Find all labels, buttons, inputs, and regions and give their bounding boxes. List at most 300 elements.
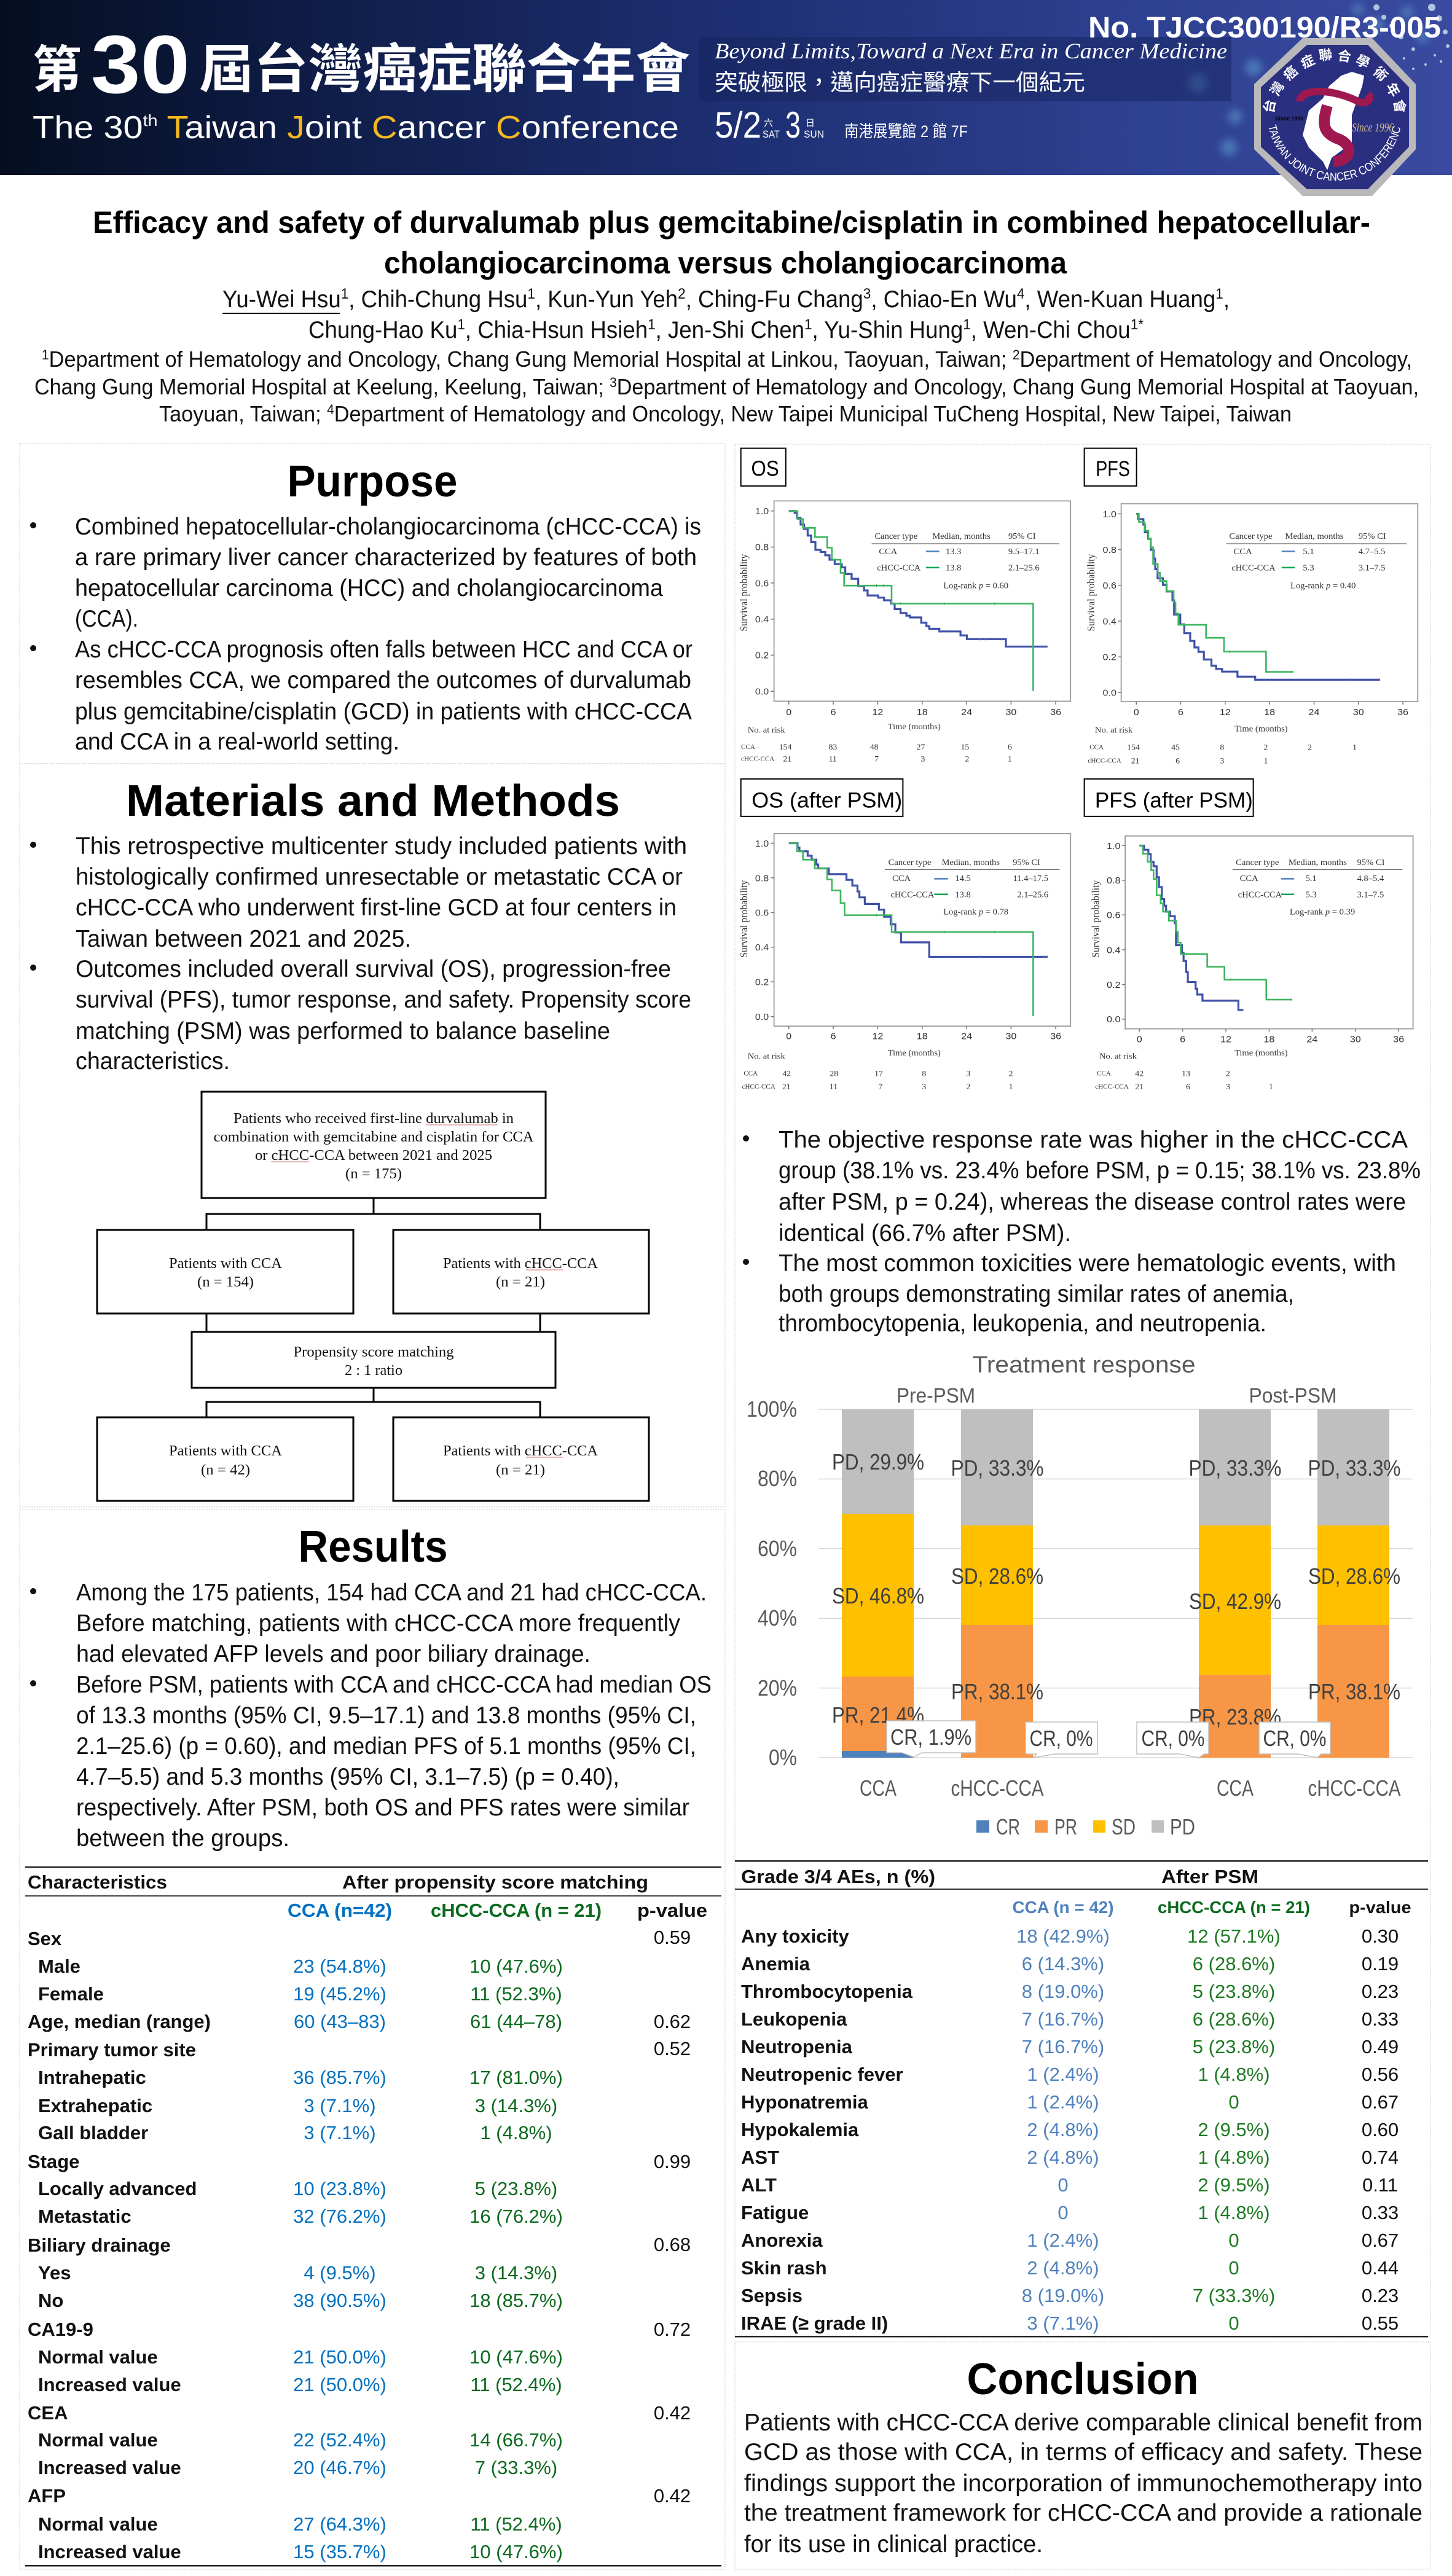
table body rows: 19 (45.2%) [293, 1983, 387, 2005]
icon: conference logo: 癌 [1281, 63, 1301, 84]
callout: CR 0% Post-PSM cHCC-CCA: CR, 0% [1263, 1726, 1326, 1751]
authors [222, 286, 1230, 343]
table body rows: 0.99 [654, 2151, 691, 2172]
number at risk: 154 [1127, 743, 1140, 752]
table body rows: 2 (4.8%) [1027, 2119, 1099, 2140]
response and toxicity bullets: The objective response rate was higher in the cHCC-CCA [779, 1127, 1408, 1153]
results bullets: respectively. After PSM, both OS and PFS rates were similar [76, 1795, 689, 1821]
table body rows: 15 (35.7%) [293, 2541, 387, 2562]
chart: OS after PSM survival curve: 36 [1050, 1032, 1061, 1041]
number at risk: 6 [1008, 742, 1012, 751]
purpose bullets: and CCA in a real-world setting. [75, 729, 399, 755]
icon: conference logo: Since 1996 [1352, 121, 1394, 135]
callout: CR 1.9% [887, 1721, 976, 1757]
chart: OS survival curve: 12 [872, 707, 883, 718]
chart: PFS after PSM survival curve: Time (months) [1234, 1049, 1288, 1058]
header banner [0, 0, 1452, 175]
authors: , [1223, 286, 1230, 313]
results bullets [30, 1580, 712, 1852]
label box: OS [741, 448, 786, 486]
number at risk: 1 [1009, 1082, 1013, 1091]
legend: 95% CI [1357, 858, 1385, 867]
purpose bullets: Combined hepatocellular-cholangiocarcinoma (cHCC-CCA) is [75, 514, 701, 540]
authors: , Kun-Yun Yeh [535, 286, 678, 313]
authors: , Chiao-En Wu [871, 286, 1017, 313]
number at risk: 154 [779, 742, 792, 751]
date and venue [715, 104, 968, 146]
chart: PFS survival curve: 0.0 [1102, 688, 1116, 698]
tagline Chinese: 突破極限，邁向癌症醫療下一個紀元 [715, 70, 1085, 95]
table: grade 3/4 adverse events [735, 1860, 1428, 2337]
icon: conference logo [1254, 38, 1416, 196]
chart: OS survival curve: 24 [961, 707, 972, 718]
heading: conclusion: Conclusion [967, 2355, 1198, 2404]
table body rows: Intrahepatic [38, 2067, 146, 2088]
panel: conclusion [744, 2355, 1423, 2558]
number at risk: 28 [830, 1069, 838, 1078]
legend: 95% CI [1008, 532, 1036, 541]
flow box: all patients: Patients who received first-line durvalumab in [233, 1111, 514, 1127]
table body rows: Skin rash [741, 2257, 827, 2279]
results bullets: had elevated AFP levels and poor biliary drainage. [76, 1641, 591, 1667]
conclusion text: for its use in clinical practice. [744, 2531, 1043, 2558]
table body rows: 0 [1228, 2312, 1239, 2334]
bar: Post-PSM cHCC-CCA: PD, 33.3% [1308, 1455, 1401, 1481]
table body rows: Sex [28, 1928, 62, 1949]
table body rows: 3 (7.1%) [304, 2095, 376, 2116]
legend: 5.3 [1303, 563, 1314, 573]
table header row [28, 1871, 707, 1921]
icon: conference logo: 灣 [1267, 79, 1287, 98]
methods bullets: cHCC-CCA who underwent first-line GCD at four centers in [76, 895, 677, 921]
date and venue: 六 [764, 118, 773, 128]
number at risk: 48 [870, 742, 879, 751]
response and toxicity bullets: identical (66.7% after PSM). [779, 1220, 1071, 1247]
table body rows: Normal value [38, 2429, 158, 2451]
flow box: cHCC-CCA after matching: (n = 21) [496, 1462, 545, 1478]
legend: 2.1–25.6 [1017, 890, 1048, 899]
poster title [93, 205, 1370, 280]
flow box: all patients: or cHCC-CCA between 2021 and 2025 [255, 1148, 492, 1164]
flow box: CCA before matching: Patients with CCA [169, 1256, 283, 1272]
label box: OS after PSM: OS (after PSM) [752, 788, 902, 812]
authors: Chung-Hao Ku [308, 317, 467, 343]
chart: PFS after PSM survival curve: 0.4 [1107, 945, 1121, 955]
number at risk: 1 [1008, 754, 1012, 763]
label box: PFS after PSM: PFS (after PSM) [1095, 788, 1253, 812]
y axis labels: 0% [769, 1745, 797, 1770]
flow box: all patients: (n = 175) [345, 1166, 402, 1182]
bar: Post-PSM cHCC-CCA: SD, 28.6% [1308, 1564, 1400, 1589]
legend: 5.1 [1303, 547, 1314, 557]
chart: PFS survival curve: 0.8 [1102, 545, 1116, 555]
authors: , Chih-Chung Hsu [348, 286, 527, 313]
table body rows: 1 (4.8%) [480, 2122, 552, 2143]
affiliations: Department of Hematology and Oncology, Chang Gung Memorial Hospital at Linkou, Taoyuan, Taiwan; [49, 346, 1013, 372]
table body rows: 10 (47.6%) [469, 2346, 563, 2368]
legend: Median, months [1289, 858, 1347, 867]
table header row: Grade 3/4 AEs, n (%) [741, 1866, 935, 1887]
number at risk: 83 [828, 742, 838, 751]
chart: OS after PSM survival curve: 24 [961, 1032, 972, 1041]
table body rows: 0.62 [654, 2011, 691, 2032]
chart: PFS survival curve: 12 [1220, 707, 1231, 718]
table body rows: 6 (14.3%) [1022, 1953, 1104, 1975]
table body rows: Primary tumor site [28, 2039, 196, 2061]
legend: 13.8 [955, 890, 971, 899]
bar: Pre-PSM CCA [832, 1409, 924, 1758]
chart legend: CR [996, 1814, 1020, 1839]
bar: Post-PSM CCA: SD, 42.9% [1189, 1589, 1281, 1614]
table body rows: Sepsis [741, 2285, 803, 2306]
table body rows: 14 (66.7%) [469, 2429, 563, 2451]
icon: conference logo: 台 [1261, 98, 1279, 114]
authors: 2 [678, 286, 686, 302]
affiliations: Chang Gung Memorial Hospital at Keelung, Keelung, Taiwan; [34, 374, 635, 399]
icon: conference logo: 合 [1336, 48, 1352, 65]
legend: 5.1 [1306, 874, 1317, 883]
table body rows: No [38, 2290, 63, 2311]
flow box: cHCC-CCA before matching [393, 1230, 649, 1313]
table body rows: 0.72 [654, 2319, 691, 2340]
number at risk: 17 [874, 1069, 883, 1078]
chart: PFS after PSM survival curve: 30 [1350, 1035, 1361, 1044]
purpose bullets: resembles CCA, we compared the outcomes of durvalumab [75, 667, 691, 694]
chart: OS after PSM survival curve: 0.4 [755, 943, 769, 953]
table body rows: Female [38, 1983, 104, 2005]
x axis labels: cHCC-CCA [1308, 1775, 1401, 1801]
table body rows: 32 (76.2%) [293, 2206, 387, 2227]
table body rows: 6 (28.6%) [1193, 1953, 1275, 1975]
number at risk: No. at risk [1095, 726, 1133, 735]
number at risk: 7 [879, 1082, 883, 1091]
legend: Median, months [932, 532, 991, 541]
legend: 11.4–17.5 [1013, 874, 1048, 883]
table body rows: 12 (57.1%) [1187, 1925, 1281, 1947]
flow box: all patients: combination with gemcitabine and cisplatin for CCA [214, 1129, 534, 1145]
chart: OS after PSM survival curve: 0.0 [755, 1012, 769, 1022]
chart: OS after PSM survival curve: Time (months) [888, 1049, 941, 1058]
table body rows: 10 (47.6%) [469, 2541, 563, 2562]
number at risk: No. at risk [1099, 1052, 1137, 1061]
number at risk: CCA [1089, 744, 1104, 751]
table body rows: Any toxicity [741, 1925, 849, 1947]
results bullets: Among the 175 patients, 154 had CCA and 21 had cHCC-CCA. [76, 1580, 707, 1606]
table body rows: 11 (52.4%) [470, 2513, 562, 2535]
legend: 4.8–5.4 [1357, 874, 1384, 883]
table body rows: Metastatic [38, 2206, 131, 2227]
number at risk: 15 [961, 742, 970, 751]
chart: OS survival curve: 6 [831, 707, 836, 718]
heading: materials and methods: Materials and Methods [126, 777, 620, 826]
legend: 4.7–5.5 [1359, 547, 1386, 557]
group label: Post-PSM: Post-PSM [1249, 1384, 1337, 1407]
conclusion text: the treatment framework for cHCC-CCA and provide a rationale [744, 2500, 1423, 2526]
chart: OS survival curve: 0.2 [755, 651, 769, 661]
affiliations: 2 [1013, 347, 1020, 362]
table body rows: Neutropenia [741, 2036, 853, 2057]
chart: OS after PSM survival curve: 6 [831, 1032, 836, 1041]
icon: conference logo: 年 [1383, 80, 1403, 100]
chart: PFS survival curve: 1.0 [1102, 509, 1116, 520]
legend [1226, 532, 1407, 590]
table body rows: 0.11 [1362, 2174, 1398, 2196]
table header row: CCA (n = 42) [1013, 1898, 1113, 1917]
number at risk: CCA [744, 1070, 758, 1077]
chart legend: SD [1112, 1814, 1136, 1839]
icon: conference logo: 症 [1298, 52, 1317, 71]
chart: PFS survival curve: 24 [1308, 707, 1320, 718]
table body rows: Increased value [38, 2541, 181, 2562]
methods bullets: histologically confirmed unresectable or metastatic CCA or [76, 864, 683, 890]
table body rows [741, 1925, 1399, 2334]
label box: OS: OS [752, 456, 779, 480]
table body rows: 11 (52.3%) [470, 1983, 562, 2005]
results bullets: 2.1–25.6) (p = 0.60), and median PFS of 5.1 months (95% CI, [76, 1733, 696, 1760]
table body rows: 1 (2.4%) [1027, 2091, 1099, 2113]
table body rows: 3 (14.3%) [475, 2262, 557, 2284]
number at risk: 21 [782, 1082, 791, 1091]
legend: Log-rank p = 0.39 [1290, 907, 1355, 917]
results bullets: of 13.3 months (95% CI, 9.5–17.1) and 13.8 months (95% CI, [76, 1702, 696, 1729]
table header row: After PSM [1161, 1866, 1258, 1887]
table body rows: 5 (23.8%) [1193, 1981, 1275, 2002]
results bullets: 4.7–5.5) and 5.3 months (95% CI, 3.1–7.5) (p = 0.40), [76, 1764, 619, 1790]
authors: 1 [648, 316, 656, 333]
table body rows: ALT [741, 2174, 777, 2196]
chart: PFS after PSM survival curve: 0.8 [1107, 876, 1120, 886]
conclusion text: findings support the incorporation of immunochemotherapy into [744, 2470, 1423, 2497]
methods bullets [30, 833, 691, 1075]
table body rows: 60 (43–83) [294, 2011, 386, 2032]
number at risk: 2 [965, 754, 969, 763]
flow box: CCA after matching: (n = 42) [201, 1462, 250, 1478]
table body rows: 3 (7.1%) [304, 2122, 376, 2143]
table header row [741, 1866, 1411, 1917]
table body rows: 0.42 [654, 2402, 691, 2424]
chart: PFS after PSM survival curve: 1.0 [1107, 841, 1121, 851]
x axis labels: CCA [1217, 1775, 1254, 1801]
chart: OS after PSM survival curve: 0.8 [755, 874, 769, 883]
number at risk: 27 [917, 742, 925, 751]
table body rows: Yes [38, 2262, 71, 2284]
panel: materials and methods [30, 777, 691, 1501]
authors: 1 [963, 316, 971, 333]
legend: Log-rank p = 0.78 [943, 907, 1008, 917]
table body rows: 0.33 [1362, 2202, 1399, 2223]
methods bullets: Outcomes included overall survival (OS), progression-free [76, 956, 671, 982]
conference title English: Taiwan Joint Cancer Conference [167, 110, 664, 146]
chart: PFS survival curve: Time (months) [1234, 724, 1288, 734]
callout: CR 0% Post-PSM CCA [1137, 1722, 1209, 1758]
legend: CCA [1234, 547, 1253, 557]
methods bullets: matching (PSM) was performed to balance baseline [76, 1018, 610, 1044]
table body rows: Normal value [38, 2513, 158, 2535]
table body rows: 0.60 [1362, 2119, 1399, 2140]
bar: Pre-PSM CCA: PR, 21.4% [832, 1702, 924, 1728]
legend: 14.5 [955, 874, 971, 883]
authors: 4 [1017, 286, 1024, 302]
number at risk: CCA [741, 743, 755, 751]
legend: 13.3 [946, 547, 961, 557]
table body rows [28, 1927, 691, 2562]
number at risk: No. at risk [748, 1052, 786, 1061]
chart: PFS after PSM survival curve: 12 [1220, 1035, 1231, 1044]
chart: PFS after PSM survival curve: 18 [1263, 1035, 1274, 1044]
chart: PFS survival curve [1085, 448, 1418, 765]
number at risk: 11 [829, 754, 837, 763]
date and venue: SUN [804, 128, 824, 140]
chart legend: PR [1054, 1814, 1077, 1839]
legend: CCA [879, 547, 898, 557]
legend: Cancer type [1229, 532, 1273, 541]
chart: OS survival curve: 36 [1050, 707, 1061, 718]
chart: PFS survival curve: 18 [1264, 707, 1275, 718]
response and toxicity bullets: group (38.1% vs. 23.4% before PSM, p = 0.15; 38.1% vs. 23.8% [779, 1157, 1421, 1184]
chart: PFS survival curve: 0 [1134, 707, 1139, 718]
table body rows: 0.52 [654, 2038, 691, 2059]
chart: OS survival curve: 0.4 [755, 615, 769, 625]
authors: , Chia-Hsun Hsieh [465, 317, 648, 343]
table body rows: 0.23 [1362, 1981, 1399, 2002]
date and venue: 5/2 [715, 104, 761, 146]
number at risk: cHCC-CCA [1095, 1083, 1129, 1090]
table body rows: Gall bladder [38, 2122, 148, 2143]
table body rows: 2 (9.5%) [1198, 2174, 1270, 2196]
results bullets: Before matching, patients with cHCC-CCA more frequently [76, 1610, 680, 1637]
callout: CR 0% Pre-PSM cHCC-CCA: CR, 0% [1030, 1726, 1093, 1751]
chart: OS survival curve: 0.8 [755, 542, 769, 553]
table body rows: IRAE (≥ grade II) [741, 2312, 888, 2334]
table body rows: Increased value [38, 2457, 181, 2478]
chart: OS survival curve: 1.0 [755, 507, 769, 517]
number at risk: cHCC-CCA [1088, 758, 1121, 764]
table body rows: 6 (28.6%) [1193, 2008, 1275, 2030]
conclusion text: GCD as those with CCA, in terms of efficacy and safety. These [744, 2439, 1423, 2465]
legend: cHCC-CCA [1238, 890, 1282, 899]
chart: PFS after PSM survival curve: 0.2 [1107, 980, 1120, 990]
table body rows: Hypokalemia [741, 2119, 859, 2140]
chart: treatment response stacked bars [747, 1352, 1413, 1839]
chart title: Treatment response [972, 1352, 1196, 1378]
chart: PFS after PSM survival curve: 0 [1137, 1035, 1142, 1044]
number at risk: 2 [1009, 1069, 1013, 1078]
table header row: CCA (n=42) [288, 1900, 392, 1921]
icon: conference logo: 聯 [1317, 47, 1333, 63]
affiliations: 3 [610, 375, 617, 390]
flow box: cHCC-CCA before matching: Patients with cHCC-CCA [443, 1256, 598, 1272]
icon: conference logo: 會 [1391, 98, 1408, 114]
table header row: p-value [637, 1900, 707, 1921]
legend: Cancer type [889, 858, 931, 867]
chart: PFS after PSM survival curve [1085, 779, 1413, 1091]
purpose bullets: hepatocellular carcinoma (HCC) and cholangiocarcinoma [75, 575, 663, 601]
conclusion text: Patients with cHCC-CCA derive comparable clinical benefit from [744, 2410, 1423, 2436]
table body rows: 2 (9.5%) [1198, 2119, 1270, 2140]
table body rows: Hyponatremia [741, 2091, 868, 2113]
table body rows: 2 (4.8%) [1027, 2147, 1099, 2168]
table body rows: 0.44 [1362, 2257, 1399, 2279]
methods bullets: This retrospective multicenter study included patients with [76, 833, 687, 859]
table body rows: 2 (4.8%) [1027, 2257, 1099, 2279]
flow box: cHCC-CCA after matching: Patients with cHCC-CCA [443, 1443, 598, 1459]
legend [871, 532, 1059, 590]
legend: Median, months [1285, 532, 1343, 541]
number at risk: 2 [966, 1082, 970, 1091]
bar: Pre-PSM cHCC-CCA: PR, 38.1% [951, 1679, 1043, 1704]
affiliations: Department of Hematology and Oncology, Chang Gung Memorial Hospital at Taoyuan, [617, 374, 1419, 399]
table body rows: 0.49 [1362, 2036, 1399, 2057]
authors: 1 [457, 316, 465, 333]
table body rows: 61 (44–78) [470, 2011, 562, 2032]
poster title: Efficacy and safety of durvalumab plus gemcitabine/cisplatin in combined hepatocellular- [93, 205, 1370, 240]
label box: OS after PSM [741, 779, 903, 816]
table body rows: Age, median (range) [28, 2011, 211, 2032]
purpose bullets [30, 514, 701, 755]
chart: OS survival curve: Survival probability [738, 554, 750, 632]
conference title Chinese: 屆台灣癌症聯合年會 [199, 40, 690, 99]
tagline backdrop [699, 37, 1231, 101]
heading: purpose: Purpose [288, 457, 457, 506]
flow box: propensity score matching: 2 : 1 ratio [345, 1363, 402, 1379]
table body rows: 36 (85.7%) [293, 2067, 387, 2088]
chart: PFS survival curve: 36 [1397, 707, 1408, 718]
methods bullets: Taiwan between 2021 and 2025. [76, 926, 411, 952]
table body rows: 8 (19.0%) [1022, 2285, 1104, 2306]
bar: Post-PSM CCA: PD, 33.3% [1188, 1455, 1282, 1481]
number at risk: cHCC-CCA [741, 756, 775, 762]
icon: conference logo: 學 [1354, 52, 1372, 71]
chart: PFS survival curve: 30 [1353, 707, 1364, 718]
abstract number: No. TJCC300190/R3-005 [1088, 12, 1441, 44]
legend: Median, months [942, 858, 1000, 867]
number at risk: 2 [1264, 743, 1268, 752]
methods bullets: characteristics. [76, 1048, 230, 1075]
chart: OS after PSM survival curve: 12 [872, 1032, 883, 1041]
legend: 9.5–17.1 [1008, 547, 1040, 557]
response and toxicity bullets: after PSM, p = 0.24), whereas the disease control rates were [779, 1189, 1406, 1215]
affiliations: Department of Hematology and Oncology, New Taipei Municipal TuCheng Hospital, New Taipei, Taiwan [334, 401, 1292, 426]
table body rows: Extrahepatic [38, 2095, 152, 2116]
table body rows: 17 (81.0%) [469, 2067, 563, 2088]
x axis labels: cHCC-CCA [951, 1775, 1043, 1801]
y axis labels: 100% [747, 1396, 797, 1422]
callout: CR 1.9%: CR, 1.9% [890, 1725, 971, 1750]
flow box: cHCC-CCA after matching [393, 1417, 649, 1501]
purpose bullets: As cHCC-CCA prognosis often falls between HCC and CCA or [75, 636, 693, 663]
number at risk: 45 [1171, 743, 1180, 752]
authors: , Wen-Chi Chou [971, 317, 1131, 343]
table body rows: Neutropenic fever [741, 2064, 903, 2085]
table body rows: 0.67 [1362, 2091, 1399, 2113]
table body rows: 0.55 [1362, 2312, 1399, 2334]
number at risk: 8 [1220, 743, 1225, 752]
chart: OS after PSM survival curve: 30 [1005, 1032, 1017, 1041]
table body rows: AFP [28, 2485, 66, 2507]
table body rows: 0.19 [1362, 1953, 1399, 1975]
table body rows: 0.59 [654, 1927, 691, 1948]
flow box: CCA before matching: (n = 154) [197, 1274, 254, 1290]
legend: 95% CI [1013, 858, 1040, 867]
legend: 13.8 [946, 563, 961, 573]
table body rows: Normal value [38, 2346, 158, 2368]
table body rows: 0 [1228, 2230, 1239, 2251]
bar: Post-PSM CCA: PR, 23.8% [1189, 1704, 1281, 1729]
table header row: After propensity score matching [342, 1871, 648, 1893]
affiliations [34, 346, 1419, 426]
chart: PFS after PSM survival curve: 0.6 [1107, 910, 1120, 920]
conference title English: th [143, 111, 158, 130]
